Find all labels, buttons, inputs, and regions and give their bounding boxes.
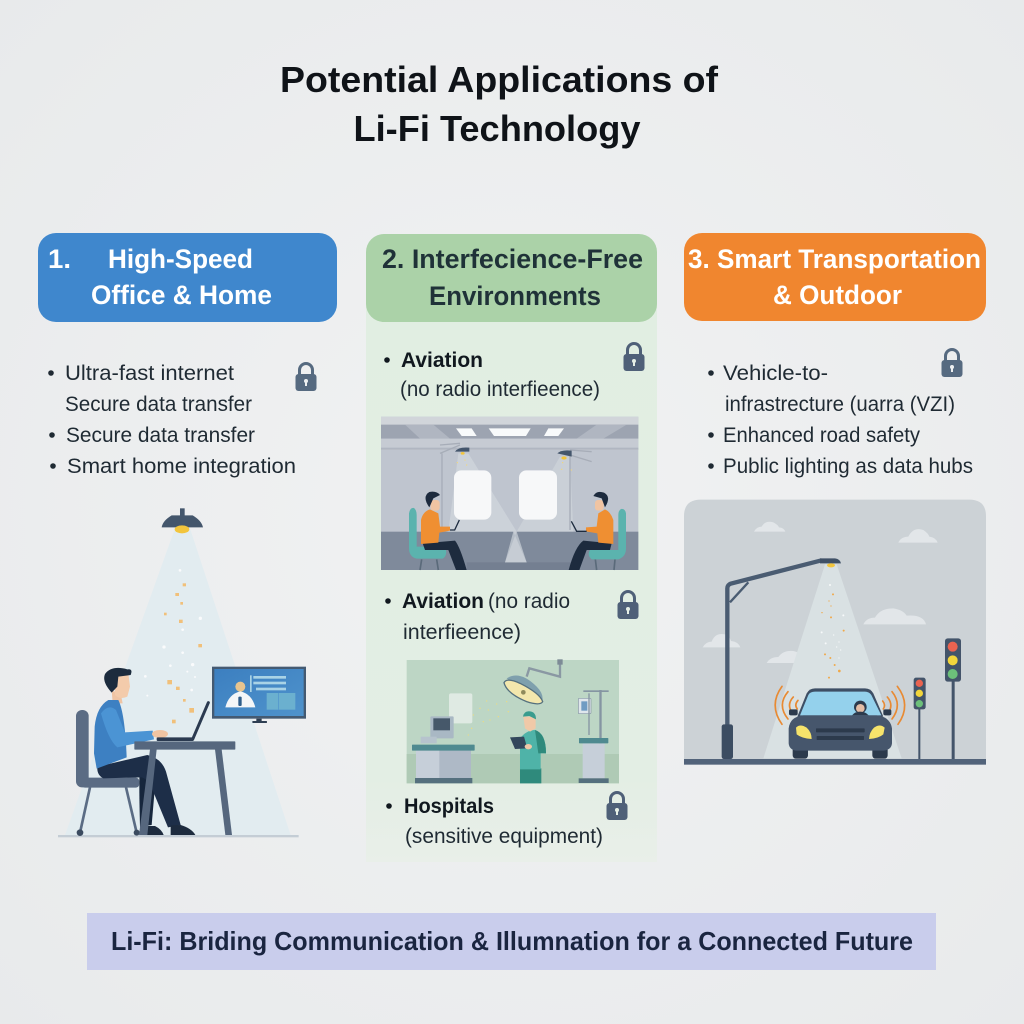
- text block: home benefits list: [48, 362, 296, 478]
- signal waves: [775, 686, 905, 724]
- text block: aviation second entry: [385, 590, 570, 644]
- text block: transport benefits list: Vehicle-to-: [723, 362, 828, 385]
- illustration: person working under Li-Fi lamp: [58, 508, 306, 837]
- icon: padlock: [618, 592, 638, 619]
- text block: aviation second entry: Aviation: [402, 590, 484, 613]
- text block: hospitals: Hospitals: [404, 795, 494, 818]
- traffic light large: [945, 638, 961, 759]
- illustration: smart street scene: [684, 500, 986, 765]
- footer banner: Li-Fi: Briding Communication & Illumnation for a Connected Future: [111, 926, 913, 956]
- data particles: [468, 700, 509, 736]
- windows: [454, 470, 557, 520]
- heading: interference-free environments: 2. Interfecience-Free: [382, 244, 643, 274]
- text block: transport benefits list: [708, 362, 973, 478]
- title: [280, 59, 719, 149]
- heading: smart transportation and outdoor: 3. Smart Transportation: [688, 244, 981, 274]
- floor line: [58, 835, 299, 837]
- title: Potential Applications of: [280, 59, 719, 100]
- icon: padlock: [606, 792, 628, 820]
- street lamp: [722, 558, 841, 759]
- sky: [684, 500, 986, 760]
- title: Li-Fi Technology: [354, 108, 640, 149]
- data particles: [821, 584, 845, 679]
- heading: high-speed office and home: [38, 233, 337, 322]
- car: [789, 688, 892, 759]
- road: [684, 759, 986, 765]
- person: [94, 668, 195, 835]
- clouds: [703, 522, 938, 663]
- footer banner: [87, 913, 936, 970]
- text block: home benefits list: Secure data transfer: [66, 424, 255, 447]
- text block: transport benefits list: Public lighting as data hubs: [723, 455, 973, 478]
- icon: padlock: [296, 364, 316, 391]
- heading: high-speed office and home: 1.: [48, 244, 71, 274]
- illustration: aircraft cabin: [381, 417, 638, 570]
- text block: home benefits list: Smart home integration: [67, 455, 296, 478]
- text block: aviation second entry: interfieence): [403, 621, 521, 644]
- illustration: hospital room: [407, 659, 619, 783]
- medical worker: [510, 711, 546, 783]
- data particles: [144, 569, 202, 723]
- right passenger: [569, 492, 626, 570]
- heading: high-speed office and home: Office & Home: [91, 280, 272, 310]
- medical equipment and table: [412, 716, 475, 783]
- text block: aviation: [384, 349, 600, 401]
- heading: smart transportation and outdoor: [684, 233, 986, 321]
- traffic light small: [914, 678, 926, 759]
- light beam: [65, 528, 291, 835]
- panel: high-speed office and home: [38, 233, 337, 837]
- chair: [76, 710, 140, 836]
- light beams: [448, 453, 527, 562]
- monitor: [212, 667, 306, 723]
- panel: interference-free environments: [366, 234, 657, 862]
- text block: aviation: Aviation: [401, 349, 483, 372]
- heading: interference-free environments: Environments: [429, 281, 601, 311]
- ceiling lamp: [162, 508, 203, 533]
- left passenger: [409, 492, 467, 570]
- light beam: [763, 564, 902, 758]
- text block: transport benefits list: infrastrecture (uarra (VZI): [725, 393, 955, 416]
- cabin background: [381, 417, 638, 570]
- room background: [407, 660, 619, 783]
- desk: [134, 741, 235, 835]
- surgical lamp: [504, 659, 563, 704]
- heading: interference-free environments: [366, 234, 657, 322]
- laptop: [157, 703, 208, 741]
- text block: aviation: (no radio interfieence): [400, 378, 600, 401]
- text block: transport benefits list: Enhanced road safety: [723, 424, 920, 447]
- ceiling lights: [456, 428, 564, 436]
- text block: aviation second entry: (no radio: [488, 590, 570, 613]
- icon: padlock: [942, 350, 962, 377]
- text block: hospitals: (sensitive equipment): [405, 825, 603, 848]
- heading: smart transportation and outdoor: & Outdoor: [773, 280, 902, 310]
- lamps: [440, 443, 592, 530]
- text block: hospitals: [386, 795, 603, 848]
- column background: [366, 300, 657, 862]
- panel: smart transportation and outdoor: [684, 233, 986, 765]
- text block: home benefits list: Secure data transfer: [65, 393, 252, 416]
- text block: home benefits list: Ultra-fast internet: [65, 362, 234, 385]
- heading: high-speed office and home: High-Speed: [108, 244, 253, 274]
- IV stand and cart: [578, 690, 609, 783]
- icon: padlock: [624, 344, 644, 371]
